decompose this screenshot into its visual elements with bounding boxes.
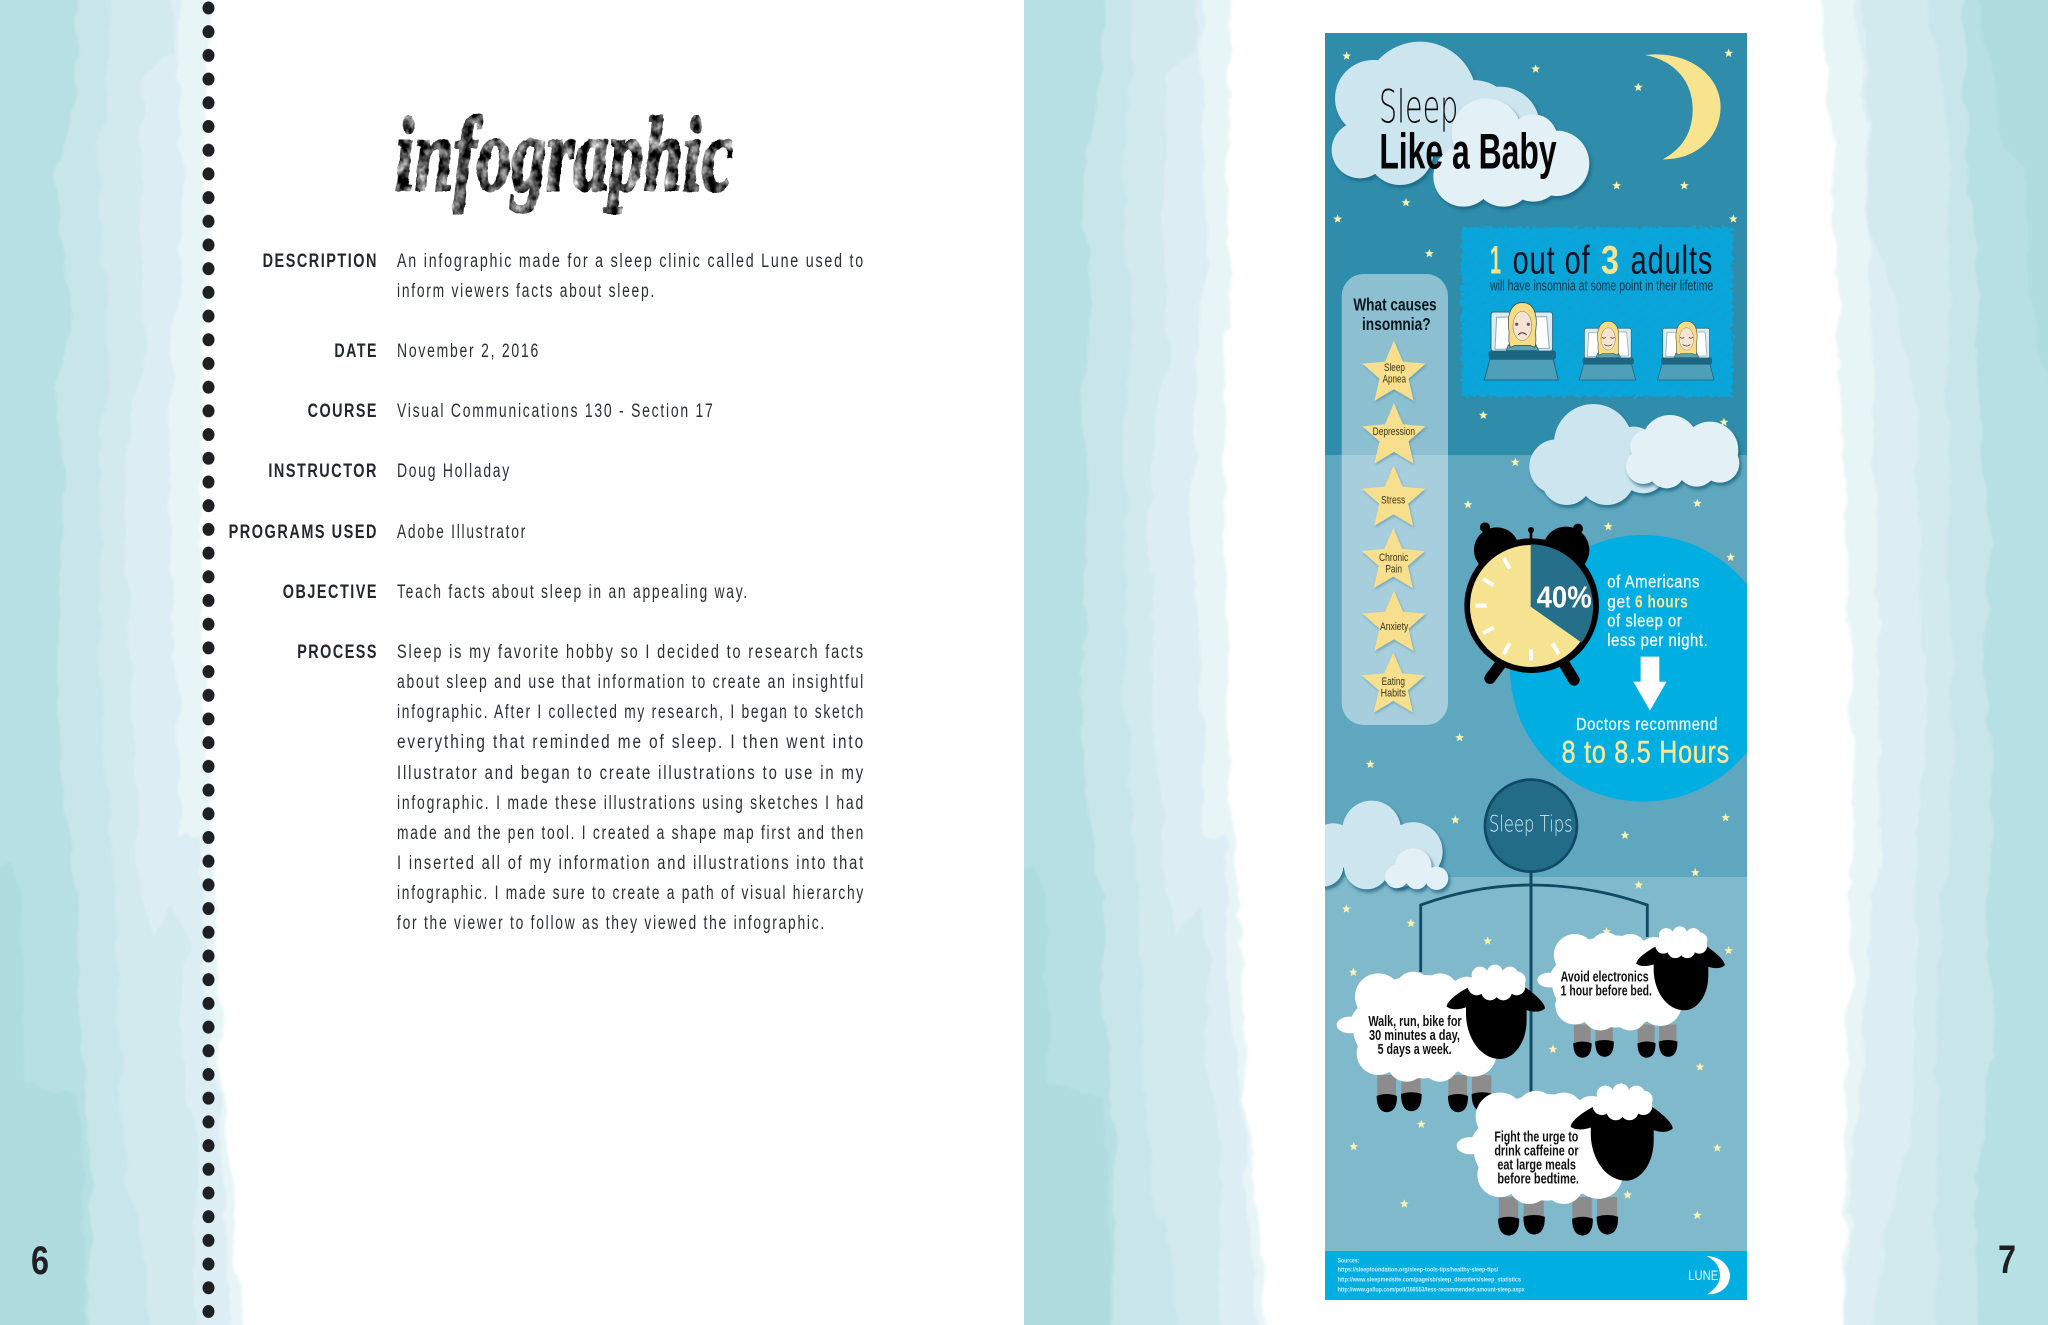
- row: process: [297, 642, 865, 934]
- row: objective: Teach facts about sleep in an appealing way.: [397, 582, 749, 603]
- sheep: caffeine tip: before bedtime.: [1497, 1171, 1579, 1187]
- star: depression: Depression: [1373, 426, 1415, 438]
- decorative clouds, middle right: [1529, 404, 1739, 505]
- sources list: http://www.gallup.com/poll/166553/less-recommended-amount-sleep.aspx: [1338, 1288, 1525, 1294]
- sheep: exercise tip: 5 days a week.: [1378, 1042, 1452, 1058]
- row: objective: [283, 582, 749, 603]
- heading: what causes insomnia: insomnia?: [1362, 314, 1431, 334]
- sleep statistic text: of sleep or: [1607, 611, 1682, 631]
- stars scattered over the sky: [1333, 49, 1738, 1219]
- back cloud: [1332, 42, 1540, 185]
- panel: six hours sleep circle: [1510, 535, 1747, 802]
- sheep: exercise tip: 30 minutes a day,: [1369, 1028, 1460, 1044]
- sources list: [1338, 1258, 1525, 1294]
- row: programs used: PROGRAMS USED: [229, 522, 378, 543]
- sources list: Sources:: [1338, 1258, 1359, 1264]
- left page watercolor wash: [0, 0, 243, 1325]
- panel: sleep infographic: [1325, 33, 1747, 1300]
- row: process: infographic. I made sure to create a path of visual hierarchy: [397, 883, 865, 904]
- icon: sleeping woman in bed 1: [1579, 321, 1636, 380]
- icon: alarm clock 40 percent chart: [1464, 522, 1599, 680]
- sources list: http://www.sleepmedsite.com/page/sb/sleep_disorders/sleep_statistics: [1338, 1278, 1522, 1284]
- statistic subheading: will have insomnia at some point in their lifetime: [1489, 279, 1713, 295]
- statistic heading: 3: [1601, 238, 1620, 282]
- badge: sleep tips: Sleep Tips: [1489, 813, 1573, 838]
- chart value: 40%: 40%: [1537, 579, 1592, 614]
- row: process: made and the pen tool. I created a shape map first and then: [397, 823, 865, 844]
- row: description: DESCRIPTION: [263, 251, 378, 272]
- arrow: down to recommendation: [1633, 657, 1667, 711]
- row: instructor: Doug Holladay: [397, 461, 511, 482]
- row: objective: OBJECTIVE: [283, 582, 378, 603]
- page heading: infographic: infographic: [395, 96, 733, 213]
- row: instructor: INSTRUCTOR: [268, 461, 378, 482]
- sleep statistic text: less per night.: [1607, 630, 1708, 650]
- star: anxiety: Anxiety: [1380, 621, 1409, 633]
- sky bands background: [1325, 33, 1747, 1251]
- decorative cloud, lower left: [1303, 801, 1448, 890]
- row: date: [334, 341, 540, 362]
- front cloud: [1433, 98, 1589, 207]
- sheep tips: [1337, 926, 1725, 1236]
- statistic heading: out of: [1513, 238, 1591, 282]
- row: programs used: Adobe Illustrator: [397, 522, 527, 543]
- star: chronic pain: Pain: [1385, 564, 1402, 576]
- row: process: PROCESS: [297, 642, 378, 663]
- sheep: exercise tip: [1337, 965, 1545, 1112]
- star: chronic pain: [1362, 528, 1425, 588]
- page number 6: 6: [31, 1239, 49, 1283]
- sheep: caffeine tip: [1457, 1084, 1673, 1236]
- sheep: caffeine tip: Fight the urge to: [1494, 1130, 1578, 1146]
- star: eating habits: [1362, 652, 1425, 713]
- row: process: everything that reminded me of sleep. I then went into: [397, 732, 865, 753]
- sources list: https://sleepfoundation.org/sleep-tools-tips/healthy-sleep-tips/: [1338, 1268, 1499, 1274]
- heading: what causes insomnia: [1353, 298, 1436, 330]
- title cloud with heading: [1332, 42, 1589, 207]
- page number 7: 7: [1998, 1238, 2016, 1282]
- logo: Lune: LUNE: [1688, 1267, 1718, 1283]
- statistic heading: [1491, 244, 1712, 274]
- project details text: [229, 251, 865, 934]
- icon: sleeping woman in bed 2: [1658, 321, 1714, 380]
- row: description: inform viewers facts about sleep.: [397, 281, 656, 302]
- sheep: exercise tip: Walk, run, bike for: [1368, 1014, 1462, 1030]
- row: description: [263, 251, 865, 302]
- sleep statistic text: 6 hours: [1635, 591, 1688, 611]
- row: course: [308, 401, 714, 422]
- footer: sources and logo: [1325, 1251, 1747, 1300]
- icon: awake woman in bed: [1484, 303, 1558, 380]
- heading: what causes insomnia: What causes: [1353, 295, 1437, 315]
- statistic heading: adults: [1631, 238, 1713, 282]
- badge: sleep tips: [1485, 780, 1577, 872]
- icon: crescent moon: [1645, 54, 1721, 159]
- row: process: about sleep and use that information to create an insightful: [397, 672, 865, 693]
- row: course: Visual Communications 130 - Section 17: [397, 401, 714, 422]
- row: process: for the viewer to follow as they viewed the infographic.: [397, 913, 826, 934]
- sheep: caffeine tip: drink caffeine or: [1494, 1144, 1579, 1160]
- row: process: Sleep is my favorite hobby so I decided to research facts: [397, 642, 865, 663]
- star: stress: [1362, 466, 1425, 526]
- title: Sleep: Sleep: [1379, 81, 1458, 134]
- row: description: An infographic made for a sleep clinic called Lune used to: [397, 251, 865, 272]
- row: course: COURSE: [308, 401, 378, 422]
- star: eating habits: Eating: [1382, 676, 1405, 688]
- panel: insomnia statistic: [1462, 227, 1733, 397]
- star: sleep apnea: Sleep: [1384, 362, 1405, 374]
- title: Like a Baby: Like a Baby: [1379, 123, 1557, 179]
- row: programs used: [229, 522, 527, 543]
- panel: what causes insomnia: [1342, 274, 1448, 725]
- text: doctors recommend: Doctors recommend: [1576, 714, 1718, 734]
- spiral binding dots: [202, 0, 215, 1325]
- sleep statistic text: [1607, 571, 1708, 650]
- star: depression: [1362, 403, 1426, 464]
- text: recommended hours: 8 to 8.5 Hours: [1562, 734, 1730, 770]
- right page watercolor wash: [1818, 0, 2048, 1325]
- row: process: infographic. I made these illustrations using sketches I had: [397, 793, 865, 814]
- star: eating habits: Habits: [1381, 688, 1406, 700]
- sheep: caffeine tip: eat large meals: [1497, 1158, 1576, 1174]
- row: process: Illustrator and began to create illustrations to use in my: [397, 763, 865, 784]
- sleep statistic text: of Americans: [1607, 571, 1700, 591]
- row: date: November 2, 2016: [397, 341, 540, 362]
- star: anxiety: [1362, 591, 1426, 651]
- sheep: electronics tip: 1 hour before bed.: [1561, 983, 1652, 999]
- star: sleep apnea: Apnea: [1383, 374, 1407, 386]
- star: sleep apnea: [1362, 341, 1426, 401]
- row: instructor: [268, 461, 511, 482]
- sheep: electronics tip: Avoid electronics: [1561, 969, 1649, 985]
- sheep: electronics tip: [1537, 926, 1725, 1058]
- middle watercolor wash: [1004, 0, 1267, 1325]
- logo: Lune: [1688, 1256, 1730, 1294]
- row: process: infographic. After I collected my research, I began to sketch: [397, 702, 865, 723]
- star: stress: Stress: [1381, 494, 1406, 506]
- row: date: DATE: [334, 341, 378, 362]
- sleep statistic text: get: [1607, 591, 1631, 611]
- mobile hanger lines: [1421, 872, 1647, 1097]
- row: process: I inserted all of my information and illustrations into that: [397, 853, 865, 874]
- statistic heading: 1: [1490, 238, 1502, 282]
- star: chronic pain: Chronic: [1379, 552, 1409, 564]
